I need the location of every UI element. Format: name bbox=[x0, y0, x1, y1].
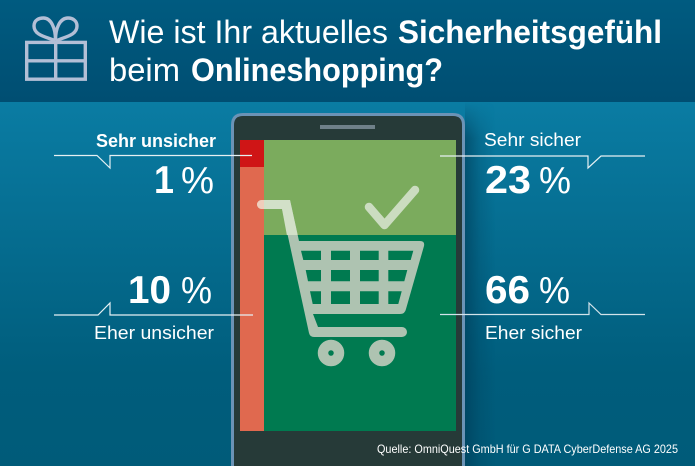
callout: Sehr unsicher: Sehr unsicher bbox=[96, 131, 216, 151]
speaker bbox=[320, 125, 375, 129]
title: Sicherheitsgefühl bbox=[398, 14, 662, 50]
phone shadow bbox=[465, 108, 487, 466]
background bbox=[0, 102, 695, 466]
callout: Sehr unsicher: % bbox=[181, 160, 214, 202]
phone body bbox=[231, 113, 465, 466]
callout: Sehr sicher: % bbox=[539, 160, 571, 202]
callout: Eher unsicher bbox=[54, 269, 253, 343]
icon: check mark bbox=[369, 190, 415, 225]
callout: Eher sicher: 66 bbox=[485, 269, 530, 312]
icon: shopping cart bbox=[257, 200, 424, 361]
callout: Eher unsicher: % bbox=[181, 270, 212, 312]
title: Onlineshopping? bbox=[191, 52, 443, 88]
callout: Sehr unsicher: 1 bbox=[154, 159, 174, 202]
chart: rather safe 66% bbox=[264, 235, 456, 431]
callout: Eher unsicher: Eher unsicher bbox=[94, 323, 214, 343]
title: beim bbox=[109, 52, 180, 88]
callout: Sehr unsicher bbox=[54, 131, 252, 202]
title: Wie ist Ihr aktuelles bbox=[109, 14, 388, 50]
callout: Sehr sicher: 23 bbox=[485, 159, 531, 202]
callout: Eher sicher: Eher sicher bbox=[485, 323, 582, 343]
chart: rather unsafe 10% bbox=[240, 167, 264, 431]
callout: Eher unsicher: 10 bbox=[128, 269, 171, 312]
icon: gift bbox=[27, 18, 85, 79]
callout: Eher sicher bbox=[440, 269, 645, 343]
callout: Sehr sicher: Sehr sicher bbox=[484, 130, 581, 150]
phone bbox=[231, 113, 465, 466]
cart handle on salmon bbox=[257, 200, 264, 209]
wheels bbox=[323, 345, 390, 361]
callout: Eher sicher: % bbox=[539, 270, 570, 312]
cart handle on light green bbox=[264, 200, 298, 235]
title bbox=[109, 14, 662, 88]
phone face bbox=[234, 116, 462, 466]
callout: Sehr sicher bbox=[440, 130, 645, 202]
header band bbox=[0, 0, 695, 102]
chart: very unsafe 1% bbox=[240, 140, 264, 167]
chart: very safe 23% bbox=[264, 140, 456, 235]
